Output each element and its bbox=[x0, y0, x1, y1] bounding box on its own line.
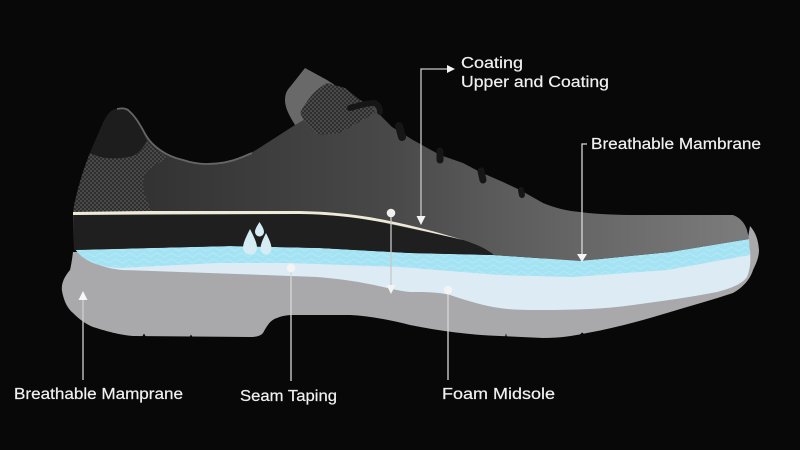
arrow: breathable membrane bbox=[577, 144, 587, 262]
label: foam midsole: Foam Midsole bbox=[442, 386, 555, 403]
outsole bbox=[62, 226, 759, 338]
label: coating bbox=[461, 55, 609, 91]
label: breathable membrane: Breathable Mambrane bbox=[591, 136, 761, 153]
heel collar bbox=[90, 108, 147, 158]
throat mesh bbox=[300, 83, 375, 135]
icon: water drops bbox=[243, 222, 272, 254]
pointer: seam taping bbox=[287, 264, 295, 381]
pointer: foam midsole bbox=[444, 286, 452, 380]
label: breathable mamprane: Breathable Mamprane bbox=[14, 386, 183, 403]
cream seam line bbox=[73, 211, 463, 240]
label: coating: Coating bbox=[461, 55, 523, 72]
heel mesh bbox=[73, 142, 167, 213]
pointer: heel arrow bbox=[78, 291, 88, 380]
laces bbox=[350, 103, 522, 195]
collar rim bbox=[117, 108, 252, 164]
label: coating: Upper and Coating bbox=[461, 74, 609, 91]
label: seam taping: Seam Taping bbox=[240, 388, 337, 405]
arrow: coating bbox=[416, 65, 455, 225]
light midsole band bbox=[80, 250, 750, 310]
dark midfoot band bbox=[74, 213, 494, 255]
outsole tread notches bbox=[142, 332, 585, 338]
tongue bbox=[285, 68, 380, 140]
upper bbox=[73, 106, 749, 261]
pointer: center arrow with dot bbox=[386, 209, 396, 294]
breathable membrane layer bbox=[75, 239, 750, 277]
